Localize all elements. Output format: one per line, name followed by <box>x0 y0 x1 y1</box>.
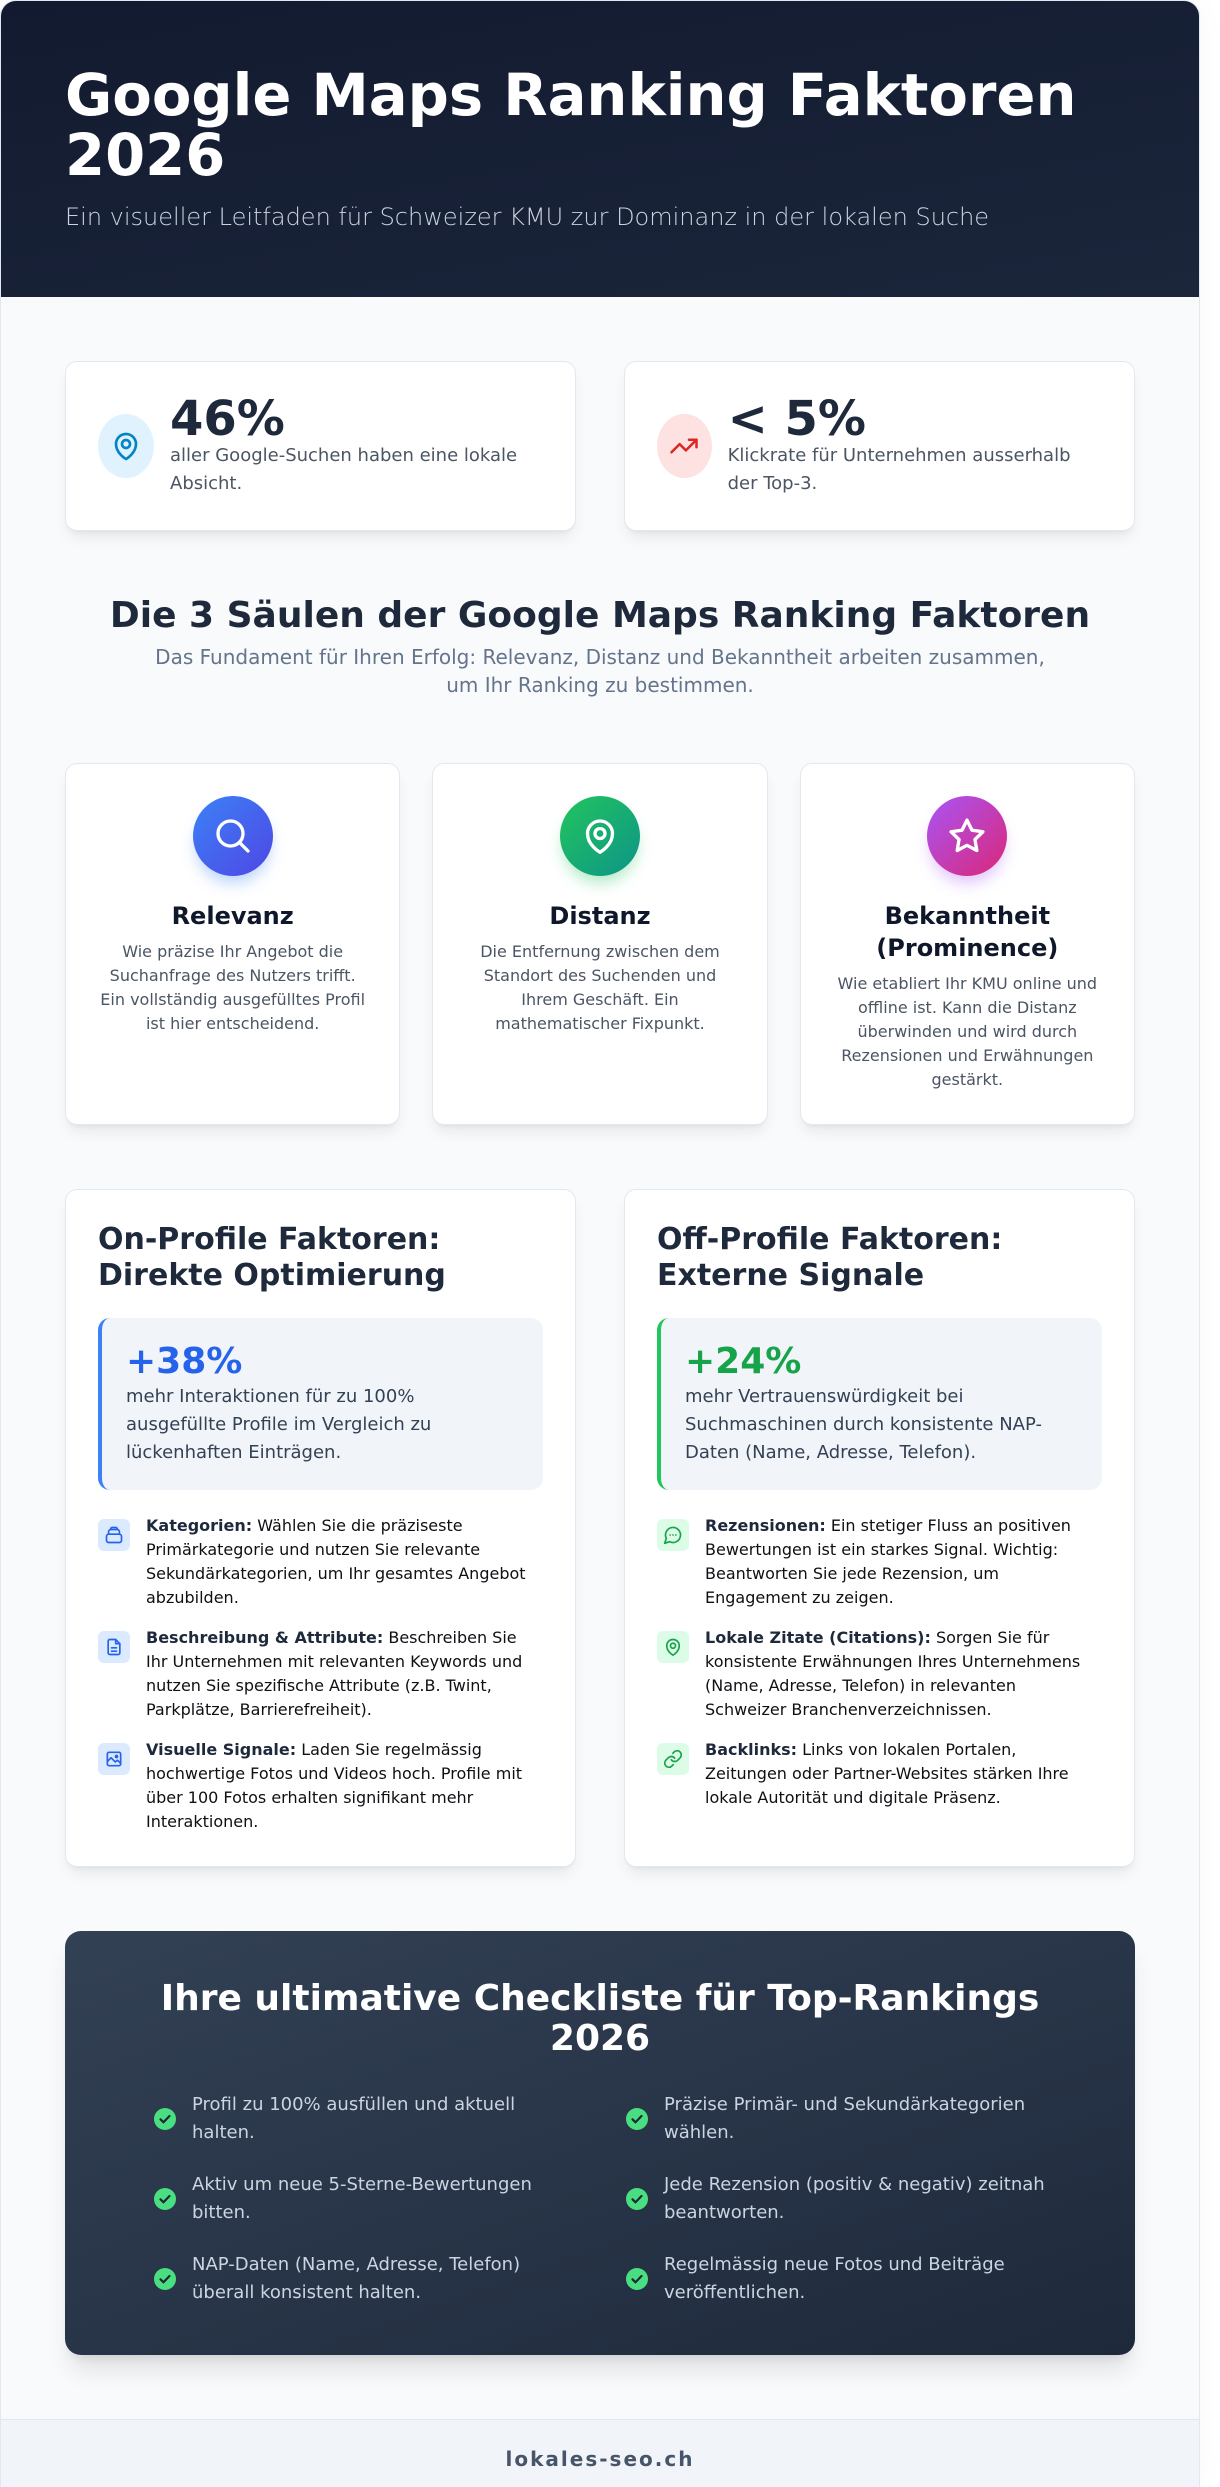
stat text: Klickrate für Unternehmen ausserhalb der Top-3. <box>728 445 1071 494</box>
stat text <box>728 391 1071 494</box>
callout: +24%: mehr Vertrauenswürdigkeit bei Suchmaschinen durch konsistente NAP-Daten (Name, Adresse, Telefon). <box>685 1386 1042 1463</box>
icon: image <box>98 1743 130 1775</box>
icon: link <box>657 1743 689 1775</box>
panel: Relevanz: Relevanz <box>172 902 294 930</box>
section heading: three pillars: um Ihr Ranking zu bestimmen. <box>446 673 754 697</box>
panel: on-profile factors <box>65 1189 576 1867</box>
list item: Visuelle Signale: Visuelle Signale: Laden Sie regelmässig hochwertige Fotos und Videos hoch. Profile mit über 100 Fotos erhalten signifikant mehr Interaktionen. <box>146 1740 522 1831</box>
footer <box>1 2419 1199 2487</box>
title: Google Maps Ranking Faktoren 2026 <box>65 62 1076 189</box>
stat text: < 5% <box>728 391 866 447</box>
stat text: aller Google-Suchen haben eine lokale Absicht. <box>170 445 517 494</box>
callout: +24%: +24% <box>685 1341 801 1382</box>
section heading: three pillars: Das Fundament für Ihren Erfolg: Relevanz, Distanz und Bekanntheit arbeiten zusammen, <box>155 645 1045 669</box>
icon: document <box>98 1631 130 1663</box>
stat card: under 5% <box>624 361 1135 531</box>
checklist item: Profil zu 100% ausfüllen und aktuell halten. <box>192 2094 515 2143</box>
callout: +24% <box>657 1318 1102 1490</box>
panel: Distanz <box>432 763 768 1125</box>
icon: search <box>193 796 273 876</box>
icon: trending arrow <box>657 414 712 478</box>
stat cards <box>65 361 1135 538</box>
panel: on-profile factors: On-Profile Faktoren: Direkte Optimierung <box>98 1222 446 1293</box>
section heading: three pillars: Die 3 Säulen der Google Maps Ranking Faktoren <box>110 595 1090 636</box>
checklist item: Aktiv um neue 5-Sterne-Bewertungen bitten. <box>192 2174 532 2223</box>
checklist item: Regelmässig neue Fotos und Beiträge veröffentlichen. <box>664 2254 1005 2303</box>
icon: chat bubble <box>657 1519 689 1551</box>
checklist item: NAP-Daten (Name, Adresse, Telefon) überall konsistent halten. <box>192 2254 520 2303</box>
list item: Backlinks: Backlinks: Links von lokalen Portalen, Zeitungen oder Partner-Websites stärken Ihre lokale Autorität und digitale Präsenz. <box>705 1740 1069 1807</box>
factor panels <box>65 1189 1135 1874</box>
panel: Bekanntheit: Wie etabliert Ihr KMU online und offline ist. Kann die Distanz überwinden und wird durch Rezensionen und Erwähnungen gestärkt. <box>838 974 1097 1089</box>
checklist item: Präzise Primär- und Sekundärkategorien wählen. <box>664 2094 1025 2143</box>
footer: lokales-seo.ch <box>506 2447 694 2471</box>
panel: checklist: Ihre ultimative Checkliste für Top-Rankings 2026 <box>161 1978 1039 2059</box>
panel: Distanz: Distanz <box>549 902 651 930</box>
icon: map pin <box>657 1631 689 1663</box>
header banner <box>1 1 1199 297</box>
list item: Lokale Zitate: Lokale Zitate (Citations): Sorgen Sie für konsistente Erwähnungen Ihres Unternehmens (Name, Adresse, Telefon) in relevanten Schweizer Branchenverzeichnissen. <box>705 1628 1080 1719</box>
callout: +38% <box>98 1318 543 1490</box>
checklist item: Jede Rezension (positiv & negativ) zeitnah beantworten. <box>664 2174 1045 2223</box>
section heading: three pillars <box>110 595 1090 697</box>
panel: Relevanz <box>65 763 400 1125</box>
panel: Distanz: Die Entfernung zwischen dem Standort des Suchenden und Ihrem Geschäft. Ein mathematischer Fixpunkt. <box>480 942 720 1033</box>
panel: off-profile factors <box>624 1189 1135 1867</box>
subtitle: Ein visueller Leitfaden für Schweizer KMU zur Dominanz in der lokalen Suche <box>65 203 989 231</box>
stat text: 46% <box>170 391 285 447</box>
panel: off-profile factors: Off-Profile Faktoren: Externe Signale <box>657 1222 1002 1293</box>
icon: stack <box>98 1519 130 1551</box>
icon: map pin <box>98 414 154 478</box>
stat card: 46% <box>65 361 576 531</box>
panel: Bekanntheit: Bekanntheit (Prominence) <box>876 902 1058 962</box>
callout: +38%: +38% <box>126 1341 242 1382</box>
panel: Relevanz: Wie präzise Ihr Angebot die Suchanfrage des Nutzers trifft. Ein vollständig ausgefülltes Profil ist hier entscheidend. <box>100 942 365 1033</box>
stat text <box>170 391 517 494</box>
panel: checklist <box>65 1931 1135 2355</box>
pillar cards <box>65 763 1135 1132</box>
list item: Rezensionen: Rezensionen: Ein stetiger Fluss an positiven Bewertungen ist ein starkes Signal. Wichtig: Beantworten Sie jede Rezension, um Engagement zu zeigen. <box>705 1516 1071 1607</box>
list item: Kategorien: Kategorien: Wählen Sie die präziseste Primärkategorie und nutzen Sie relevante Sekundärkategorien, um Ihr gesamtes Angebot abzubilden. <box>146 1516 526 1607</box>
list item: Beschreibung: Beschreibung & Attribute: Beschreiben Sie Ihr Unternehmen mit relevanten Keywords und nutzen Sie spezifische Attribute (z.B. Twint, Parkplätze, Barrierefreiheit). <box>146 1628 522 1719</box>
icon: star <box>927 796 1007 876</box>
checklist items <box>154 2094 1045 2303</box>
icon: map pin <box>560 796 640 876</box>
callout: +38%: mehr Interaktionen für zu 100% ausgefüllte Profile im Vergleich zu lückenhaften Einträgen. <box>126 1386 431 1463</box>
panel: Bekanntheit <box>800 763 1135 1125</box>
